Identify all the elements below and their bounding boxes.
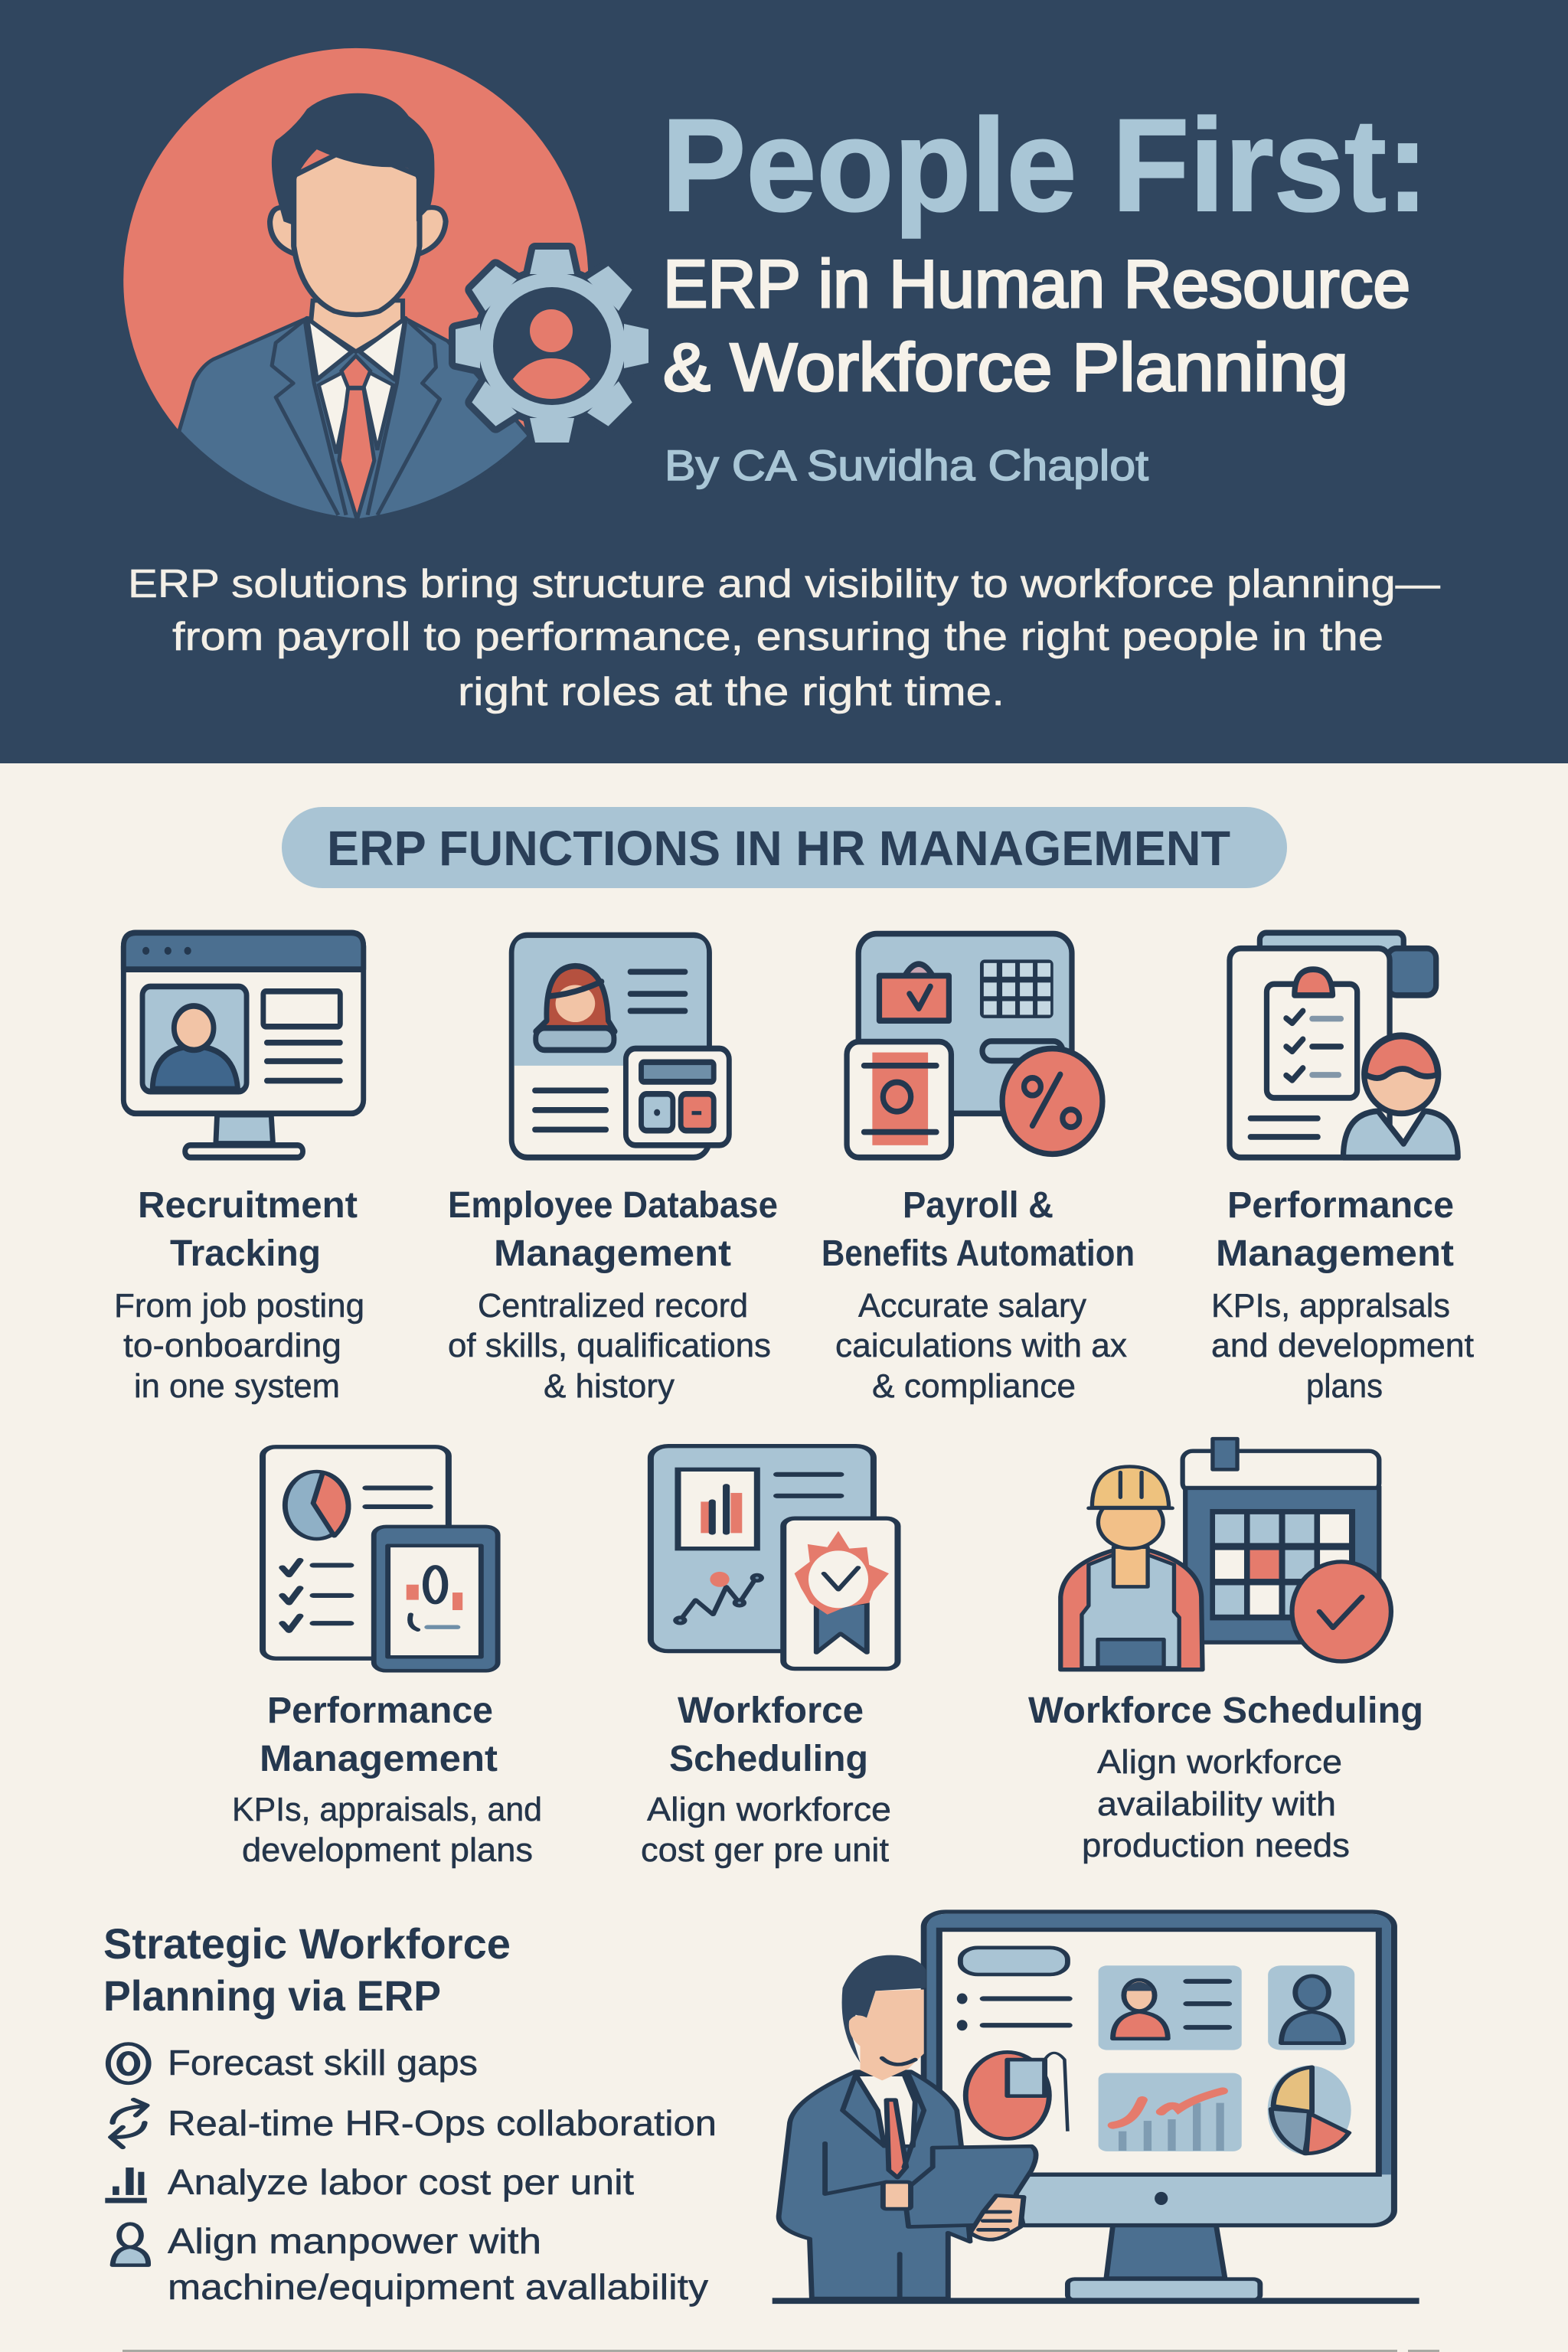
subtitle: ERP in Human Resource — [663, 246, 1410, 322]
heading: Performance — [1227, 1185, 1454, 1226]
heading: Management — [260, 1739, 498, 1779]
description: development plans — [242, 1831, 533, 1869]
description — [1211, 1287, 1474, 1405]
dashboard list — [957, 1948, 1069, 2030]
dashboard bar and trend chart — [1099, 2073, 1242, 2151]
title: People First: — [662, 92, 1429, 239]
subtitle — [663, 246, 1410, 405]
panel: workforce scheduling (cost) — [641, 1446, 897, 1869]
list item: forecast skill gaps: Forecast skill gaps — [168, 2043, 478, 2082]
floor line — [773, 2298, 1419, 2304]
heading — [260, 1690, 498, 1779]
dashboard pie chart — [965, 2052, 1067, 2138]
intro paragraph: ERP solutions bring structure and visibility to workforce planning— — [128, 562, 1440, 606]
heading: Strategic Workforce — [103, 1919, 511, 1968]
description: of skills, qualifications — [448, 1327, 771, 1364]
description — [114, 1287, 364, 1405]
heading: Workforce — [678, 1690, 864, 1731]
intro paragraph: right roles at the right time. — [458, 670, 1004, 714]
icon: worker with calendar — [1060, 1439, 1391, 1670]
list item: real-time collaboration — [111, 2099, 717, 2148]
panel: strategic workforce planning — [103, 1919, 717, 2307]
description — [641, 1791, 891, 1869]
list item: real-time collaboration: Real-time HR-Ops collaboration — [168, 2103, 717, 2143]
presenter figure — [779, 1955, 1036, 2298]
icon: report with tablet — [263, 1447, 498, 1671]
heading — [448, 1185, 778, 1274]
heading — [138, 1185, 358, 1274]
heading: Management — [1216, 1233, 1454, 1274]
heading: Tracking — [170, 1233, 321, 1274]
list item: align manpower — [113, 2221, 708, 2307]
icon: appraisal clipboard with employee — [1230, 933, 1458, 1158]
intro paragraph: from payroll to performance, ensuring the right people in the — [172, 615, 1383, 659]
icon: analytics board with award badge — [651, 1446, 897, 1669]
panel: workforce scheduling (availability) — [1028, 1439, 1423, 1864]
icon: employee record card — [511, 935, 729, 1158]
description — [1082, 1743, 1350, 1864]
heading: Recruitment — [138, 1185, 358, 1226]
description: & compliance — [872, 1367, 1076, 1405]
description — [835, 1287, 1127, 1405]
heading: Scheduling — [669, 1739, 868, 1779]
description: availability with — [1097, 1785, 1336, 1823]
heading: Planning via ERP — [103, 1971, 441, 2020]
heading — [669, 1690, 868, 1779]
description: caiculations with ax — [835, 1327, 1127, 1364]
heading: Benefits Automation — [822, 1233, 1135, 1274]
description — [448, 1287, 771, 1405]
intro paragraph — [128, 562, 1440, 714]
description: Centralized record — [478, 1287, 748, 1325]
description: & history — [544, 1367, 675, 1405]
illustration: presenter with dashboard monitor — [773, 1912, 1419, 2304]
panel: payroll and benefits automation — [822, 934, 1135, 1405]
monitor frame — [924, 1912, 1394, 2226]
description: plans — [1306, 1367, 1383, 1405]
description: production needs — [1082, 1827, 1350, 1864]
heading — [103, 1919, 511, 2020]
illustration: businessman portrait in coral circle — [123, 48, 588, 521]
list item: labor cost: Analyze labor cost per unit — [168, 2162, 634, 2202]
dashboard segmented pie — [1268, 2066, 1351, 2155]
icon: gear with person — [456, 250, 648, 443]
description: Align workforce — [1097, 1743, 1342, 1781]
panel: employee database management — [448, 935, 778, 1405]
description: to-onboarding — [123, 1327, 341, 1364]
description: in one system — [134, 1367, 340, 1405]
subtitle: & Workforce Planning — [663, 329, 1348, 405]
description: Align workforce — [647, 1791, 891, 1828]
description: KPIs, appralsals — [1211, 1287, 1450, 1325]
heading: Payroll & — [903, 1185, 1054, 1226]
description: From job posting — [114, 1287, 364, 1325]
panel: performance management (top row) — [1211, 933, 1474, 1405]
heading: Management — [494, 1233, 731, 1274]
panel: header — [0, 0, 1568, 763]
description: KPIs, appraisals, and — [232, 1791, 542, 1828]
description: Accurate salary — [858, 1287, 1086, 1325]
icon: monitor with candidate profile — [123, 933, 364, 1158]
monitor stand — [1067, 2226, 1260, 2300]
icon: payroll dashboard with percent badge — [847, 934, 1102, 1158]
description: and development — [1211, 1327, 1474, 1364]
author byline: By CA Suvidha Chaplot — [665, 441, 1148, 489]
panel: recruitment tracking — [114, 933, 364, 1405]
heading: Performance — [267, 1690, 493, 1731]
panel: performance management (second row) — [232, 1447, 542, 1869]
section heading pill — [282, 807, 1287, 888]
section heading pill: ERP FUNCTIONS IN HR MANAGEMENT — [327, 821, 1230, 876]
list item: align manpower: Align manpower with — [168, 2221, 541, 2261]
heading — [1216, 1185, 1454, 1274]
list item: align manpower: machine/equipment avallability — [168, 2267, 708, 2307]
description — [232, 1791, 542, 1869]
dashboard person cards — [1099, 1965, 1354, 2050]
heading: Workforce Scheduling — [1028, 1690, 1423, 1731]
description: cost ger pre unit — [641, 1831, 889, 1869]
heading — [822, 1185, 1135, 1274]
heading: Employee Database — [448, 1185, 778, 1226]
